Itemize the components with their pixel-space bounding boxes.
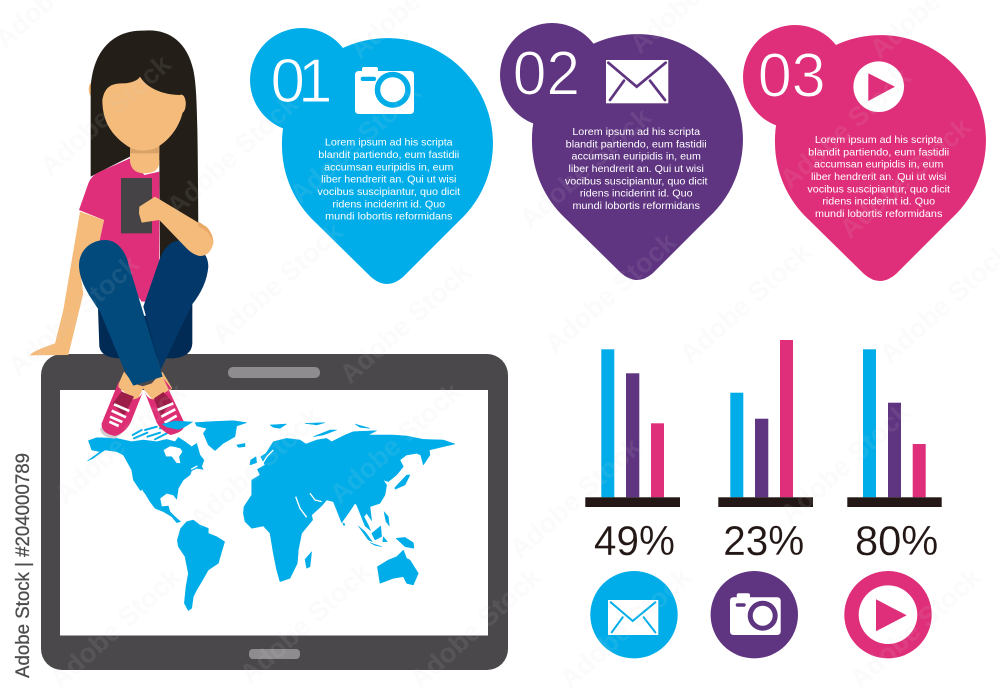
stock watermark overlay: Adobe Stock: [674, 236, 817, 369]
body text: mundi lobortis reformidans: [325, 212, 452, 223]
stock watermark overlay: Adobe Stock: [34, 48, 177, 181]
body text: vocibus suscipiantur, quo dicit: [807, 184, 950, 195]
iceland: [237, 443, 245, 447]
right ankle: [142, 372, 172, 402]
percentage 23: 23%: [723, 517, 804, 564]
bar chart 1: [585, 349, 680, 507]
face: [102, 77, 186, 151]
indonesia and philippines: [358, 512, 389, 547]
red sea and gulf: [296, 493, 322, 517]
body text: Lorem ipsum ad his scripta: [572, 127, 700, 138]
map island over shoe: [162, 421, 193, 430]
number: 02: [513, 39, 580, 108]
bubble shape: [743, 25, 986, 281]
illustration: seated girl with phone: [30, 30, 213, 439]
body text: mundi lobortis reformidans: [815, 209, 942, 220]
body text: vocibus suscipiantur, quo dicit: [565, 176, 708, 187]
body text: ridens inciderint id. Quo: [580, 189, 693, 200]
ear: [89, 83, 95, 96]
south america: [177, 520, 225, 611]
body text: accumsan euripidis in, eum: [572, 152, 701, 163]
percentage 80: 80%: [855, 517, 938, 564]
stock watermark overlay: Adobe Stock: [184, 401, 327, 534]
body text: [317, 138, 460, 223]
supporting arm: [30, 212, 104, 355]
under thighs: [98, 300, 192, 358]
body text: ridens inciderint id. Quo: [332, 199, 445, 210]
australia: [377, 550, 418, 585]
stock watermark overlay: Adobe Stock: [774, 396, 917, 529]
phone: [121, 178, 152, 233]
british isles: [250, 457, 257, 465]
icon: play: [853, 61, 904, 112]
stock watermark overlay: Adobe Stock: [324, 376, 467, 509]
icon: envelope: [606, 60, 668, 103]
bar chart 2: [718, 340, 813, 507]
stock watermark overlay: Adobe Stock: [404, 561, 547, 694]
body text: liber hendrerit an. Qui ut wisi: [569, 164, 704, 175]
panel: callout 03: [743, 25, 986, 281]
holding arm: [139, 197, 213, 256]
bar chart 3: [847, 349, 942, 507]
new guinea: [396, 537, 414, 548]
northern islands: [270, 423, 370, 437]
sri lanka: [343, 523, 345, 526]
bubble shape: [250, 28, 493, 284]
stock watermark overlay: Adobe Stock: [234, 556, 377, 689]
number: 0: [270, 47, 305, 116]
stock watermark overlay: Adobe Stock: [2, 248, 145, 381]
body text: [565, 127, 708, 212]
neck: [130, 143, 159, 173]
right shoe: [143, 378, 184, 435]
body text: blandit partiendo, eum fastidii: [318, 150, 459, 161]
panel: callout 02: [500, 23, 743, 280]
left ankle: [117, 372, 144, 402]
icon: camera badge: [711, 571, 798, 658]
stock watermark overlay: Adobe Stock: [834, 111, 977, 244]
stock watermark overlay: Adobe Stock: [206, 216, 349, 349]
number: 03: [758, 42, 826, 111]
shirt: [79, 158, 159, 302]
bubble shape: [500, 23, 743, 280]
stock watermark overlay: Adobe Stock: [844, 561, 987, 694]
percentage 49: 49%: [594, 517, 675, 564]
body text: ridens inciderint id. Quo: [822, 197, 935, 208]
panel: tablet: [41, 354, 508, 670]
body text: liber hendrerit an. Qui ut wisi: [321, 175, 456, 186]
body text: blandit partiendo, eum fastidii: [808, 147, 949, 158]
body text: mundi lobortis reformidans: [573, 201, 700, 212]
front leg: [79, 240, 163, 386]
japan: [395, 475, 410, 489]
baja and great lakes slits: [142, 466, 197, 502]
back leg: [143, 241, 208, 370]
icon: camera: [355, 67, 414, 114]
africa and eurasia: [243, 431, 455, 582]
body text: liber hendrerit an. Qui ut wisi: [811, 172, 946, 183]
body text: blandit partiendo, eum fastidii: [566, 139, 707, 150]
stock watermark overlay: Adobe Stock: [504, 431, 647, 564]
body text: accumsan euripidis in, eum: [324, 162, 453, 173]
body text: Lorem ipsum ad his scripta: [325, 138, 453, 149]
world map: [87, 421, 455, 611]
neck shadow: [130, 145, 159, 153]
elbow shading: [198, 222, 213, 243]
icon: play badge: [844, 571, 932, 658]
stock watermark overlay: Adobe Stock: [284, 76, 427, 209]
stock watermark overlay: Adobe Stock: [554, 561, 697, 694]
icon: envelope badge: [590, 571, 678, 658]
north america: [87, 437, 204, 523]
body text: vocibus suscipiantur, quo dicit: [317, 187, 460, 198]
stock watermark overlay: Adobe Stock: [774, 61, 917, 194]
body text: [807, 135, 950, 220]
left shoe: [100, 380, 143, 439]
stock id side text: Adobe Stock | #204000789: [13, 453, 34, 678]
arctic islands: [133, 426, 172, 439]
body text: Lorem ipsum ad his scripta: [815, 135, 943, 146]
panel: callout 01: [250, 28, 493, 284]
greenland: [195, 421, 247, 451]
stock watermark overlay: Adobe Stock: [334, 256, 477, 389]
stock watermark overlay: Adobe Stock: [539, 226, 682, 359]
stock watermark overlay: Adobe Stock: [44, 561, 187, 694]
hair: [91, 30, 198, 260]
stock watermark overlay: Adobe Stock: [49, 376, 192, 509]
baltic slit: [263, 450, 273, 463]
madagascar: [305, 552, 312, 568]
number: 1: [298, 47, 332, 116]
body text: accumsan euripidis in, eum: [814, 160, 943, 171]
stock watermark overlay: Adobe Stock: [514, 101, 657, 234]
stock watermark overlay: Adobe Stock: [161, 88, 304, 221]
